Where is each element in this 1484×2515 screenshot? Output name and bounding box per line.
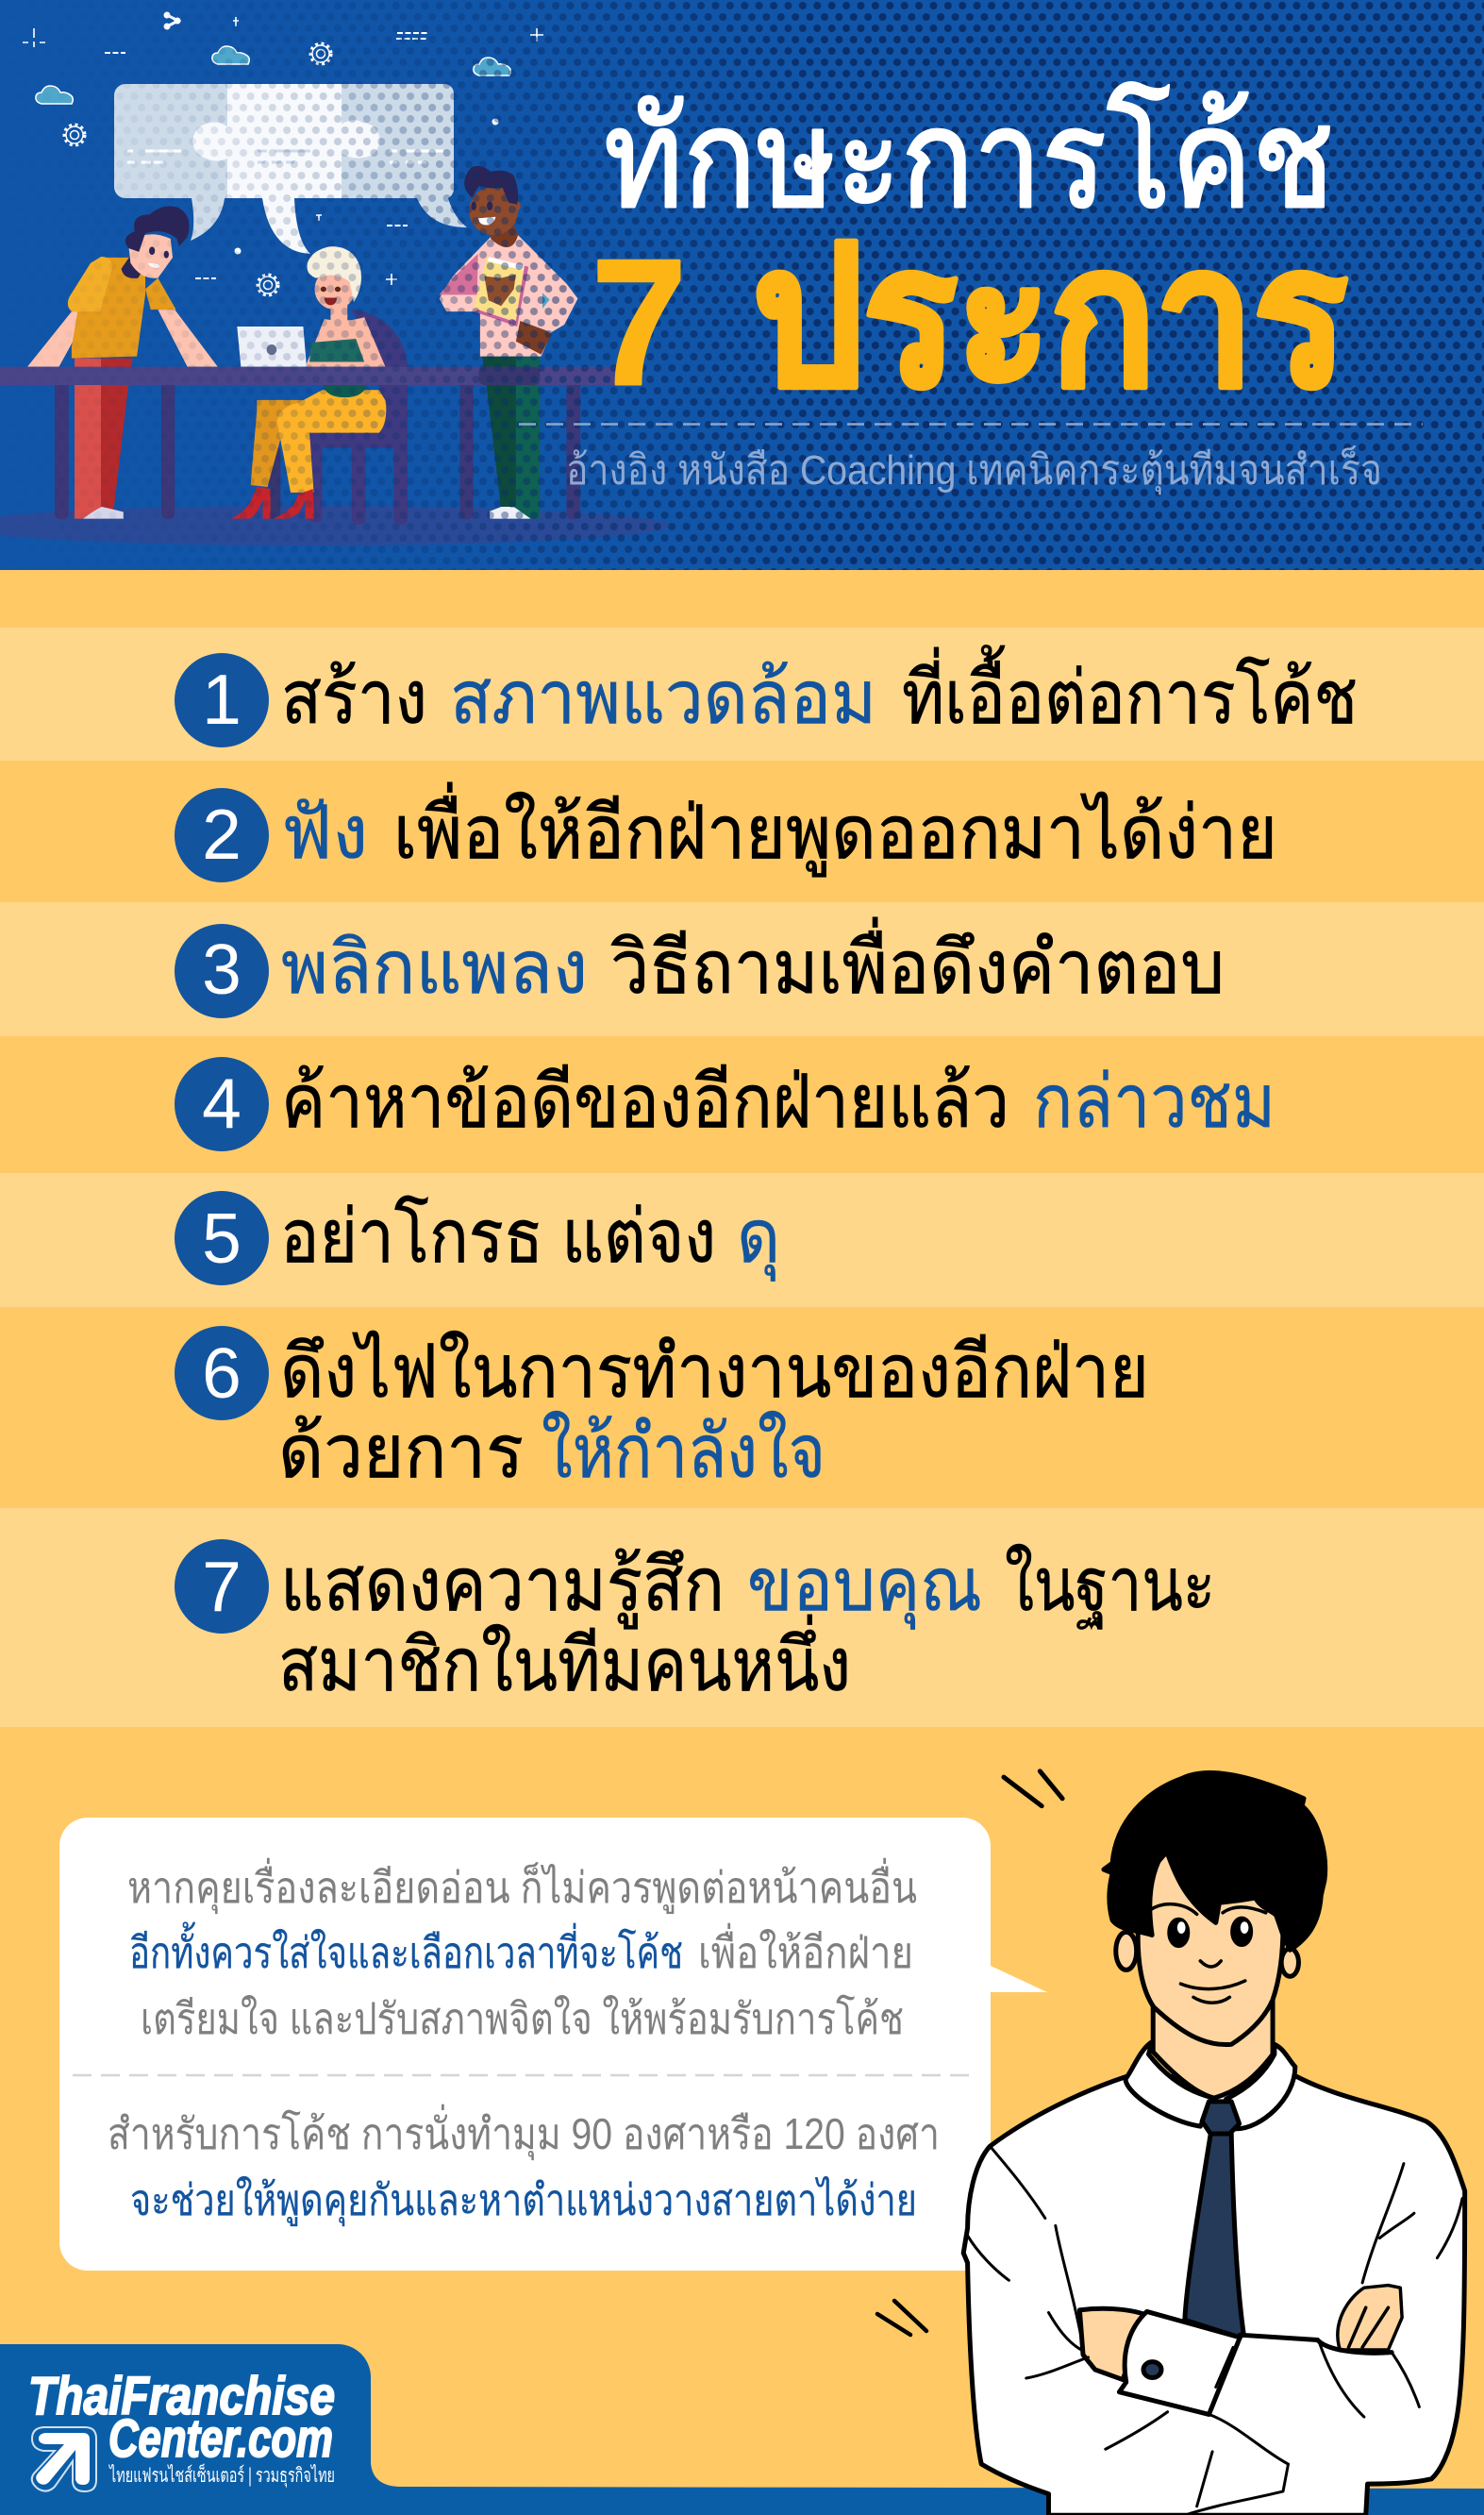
item 3: พลิกแพลง [281, 926, 588, 1009]
floor shadow [0, 506, 670, 545]
item 3: 3 [202, 930, 242, 1009]
title line 2: ประการ [753, 210, 1347, 426]
chair [269, 310, 408, 525]
item 7: ขอบคุณ [747, 1543, 982, 1630]
icon: arrow [32, 2427, 96, 2491]
collar [1126, 2042, 1214, 2126]
emphasis ticks [1004, 1771, 1062, 1806]
callout text: second advice: จะช่วยให้พูดคุยกันและหาตำแหน่งวางสายตาได้ง่าย [130, 2175, 917, 2227]
item 6 [175, 1326, 1149, 1493]
item 1: ที่เอื้อต่อการโค้ช [902, 645, 1358, 739]
table top [0, 367, 615, 385]
hair [1104, 1772, 1326, 1950]
callout text: first advice: เตรียมใจ และปรับสภาพจิตใจ ให้พร้อมรับการโค้ช [141, 1994, 904, 2043]
table legs [55, 385, 580, 520]
item 6: ด้วยการ [278, 1410, 524, 1493]
hands [1079, 2308, 1147, 2380]
item 7: ในฐานะ [1005, 1543, 1215, 1629]
item 1: สร้าง [281, 656, 427, 739]
halftone dots [0, 0, 1484, 570]
ears [1116, 1932, 1137, 1970]
item 1: สภาพแวดล้อม [450, 656, 876, 739]
logo wordmark: Center.com [108, 2408, 333, 2469]
shirt [963, 2077, 1465, 2515]
table legs and chair [0, 166, 615, 525]
speech bubble puzzle [114, 84, 467, 254]
logo wordmark: ThaiFranchise [28, 2366, 335, 2426]
item 7 [175, 1539, 1215, 1706]
bottom blue strip and logo tab [0, 2344, 1484, 2515]
item 4: ค้าหาข้อดีของอีกฝ่ายแล้ว [281, 1060, 1009, 1143]
necktie [1185, 2134, 1243, 2338]
logo [28, 2366, 335, 2491]
item 1 [175, 645, 1358, 747]
callout text: second advice: สำหรับการโค้ช การนั่งทำมุม 90 องศาหรือ 120 องศา [108, 2104, 940, 2161]
list panel: seven skills [0, 628, 1484, 1727]
shirt folds [968, 2146, 1462, 2515]
person: man in yellow shirt [27, 206, 218, 519]
item 2: ฟัง [281, 791, 368, 874]
item 2 [175, 782, 1277, 882]
cuff and sleeve [1119, 2311, 1240, 2414]
illustration: businessman with crossed arms [963, 1771, 1465, 2515]
person: man in pink sweater [440, 166, 577, 519]
icons floating in the sky [23, 15, 543, 295]
header panel [0, 0, 1484, 570]
item 5: 5 [202, 1199, 242, 1278]
item 2: 2 [202, 795, 242, 874]
title line 1: ทักษะการโค้ช [604, 82, 1334, 236]
dashed divider [519, 423, 1423, 426]
item 4: 4 [202, 1064, 242, 1143]
item 4: กล่าวชม [1033, 1060, 1276, 1143]
face [1138, 1836, 1283, 2045]
item 7: สมาชิกในทีมคนหนึ่ง [278, 1615, 851, 1706]
item 7: แสดงความรู้สึก [280, 1543, 725, 1629]
person: woman at laptop [231, 246, 386, 519]
callout text: first advice: เพื่อให้อีกฝ่าย [698, 1922, 913, 1977]
illustration: team at table [0, 11, 670, 545]
item 3 [175, 917, 1225, 1018]
item 6: ให้กำลังใจ [542, 1410, 825, 1493]
item 5: อย่าโกรธ แต่จง [280, 1195, 716, 1278]
neck [1153, 2000, 1273, 2098]
callout speech bubble [59, 1818, 1047, 2271]
callout text: first advice: หากคุยเรื่องละเอียดอ่อน ก็ไม่ควรพูดต่อหน้าคนอื่น [127, 1857, 917, 1915]
callout text: first advice: อีกทั้งควรใส่ใจและเลือกเวลาที่จะโค้ช [129, 1921, 683, 1977]
logo wordmark [28, 2366, 335, 2469]
item 5: ดุ [737, 1195, 780, 1282]
title line 2: 7 [592, 223, 687, 423]
logo tagline: ไทยแฟรนไชส์เซ็นเตอร์ | รวมธุรกิจไทย [108, 2462, 335, 2488]
item 4 [175, 1057, 1276, 1151]
item 3: วิธีถามเพื่อดึงคำตอบ [610, 917, 1225, 1009]
item 7: 7 [202, 1547, 242, 1626]
item 6: 6 [202, 1333, 242, 1413]
item 1: 1 [202, 660, 242, 739]
item 2: เพื่อให้อีกฝ่ายพูดออกมาได้ง่าย [393, 782, 1277, 877]
icon: emphasis ticks lower [877, 2301, 926, 2335]
item 6: ดึงไฟในการทำงานของอีกฝ่าย [280, 1330, 1149, 1413]
facial features [1150, 1904, 1266, 2003]
source subtitle: อ้างอิง หนังสือ Coaching เทคนิคกระตุ้นทีมจนสำเร็จ [566, 445, 1382, 495]
callout text: second advice [108, 2104, 940, 2227]
callout text: first advice [127, 1857, 917, 2043]
